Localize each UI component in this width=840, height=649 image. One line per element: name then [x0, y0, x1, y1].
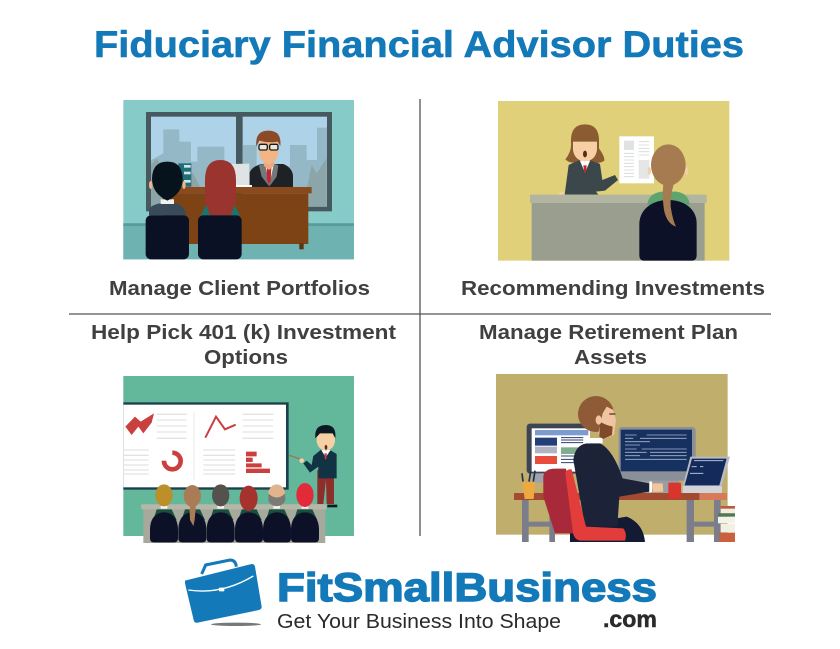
wordmark: FitSmallBusiness	[277, 566, 657, 610]
whiteboard	[123, 402, 289, 490]
chair	[543, 469, 578, 533]
label: help pick 401(k) investment options	[91, 321, 396, 369]
laptop	[231, 164, 249, 186]
label: help pick 401(k) investment options: Options	[204, 346, 288, 369]
desk	[158, 187, 312, 193]
panel: manage retirement plan assets illustration	[496, 374, 735, 542]
audience	[153, 509, 317, 520]
audience table	[143, 504, 325, 543]
desk legs	[522, 500, 721, 542]
panel: manage client portfolios illustration	[123, 100, 354, 259]
chart icons	[125, 413, 154, 435]
label: manage retirement plan assets: Assets	[574, 346, 647, 369]
advisor woman	[565, 159, 618, 195]
panel: 401k investment options illustration	[123, 376, 354, 543]
document	[619, 136, 654, 183]
domain: .com	[603, 606, 657, 632]
title: Fiduciary Financial Advisor Duties	[94, 24, 744, 65]
mug	[522, 482, 535, 499]
desk	[532, 200, 705, 261]
monitor left	[527, 424, 590, 474]
icon: briefcase	[185, 560, 262, 626]
man	[570, 517, 645, 542]
label: manage retirement plan assets	[479, 321, 738, 369]
client: dark hair	[149, 203, 186, 215]
label: recommending investments: Recommending Investments	[461, 277, 765, 300]
tagline: Get Your Business Into Shape	[277, 611, 561, 633]
client	[648, 167, 651, 175]
label: manage client portfolios: Manage Client Portfolios	[109, 277, 370, 300]
desk top	[514, 493, 727, 500]
monitor center	[625, 473, 682, 493]
logo: Fit Small Business	[185, 560, 657, 633]
label: help pick 401(k) investment options: Help Pick 401 (k) Investment	[91, 321, 396, 344]
label: manage retirement plan assets: Manage Retirement Plan	[479, 321, 738, 344]
advisor	[250, 164, 293, 187]
books	[721, 506, 735, 513]
client: red hair	[201, 204, 240, 215]
presenter	[289, 455, 302, 459]
panel: recommending investments illustration	[498, 101, 729, 261]
laptop	[683, 457, 730, 487]
